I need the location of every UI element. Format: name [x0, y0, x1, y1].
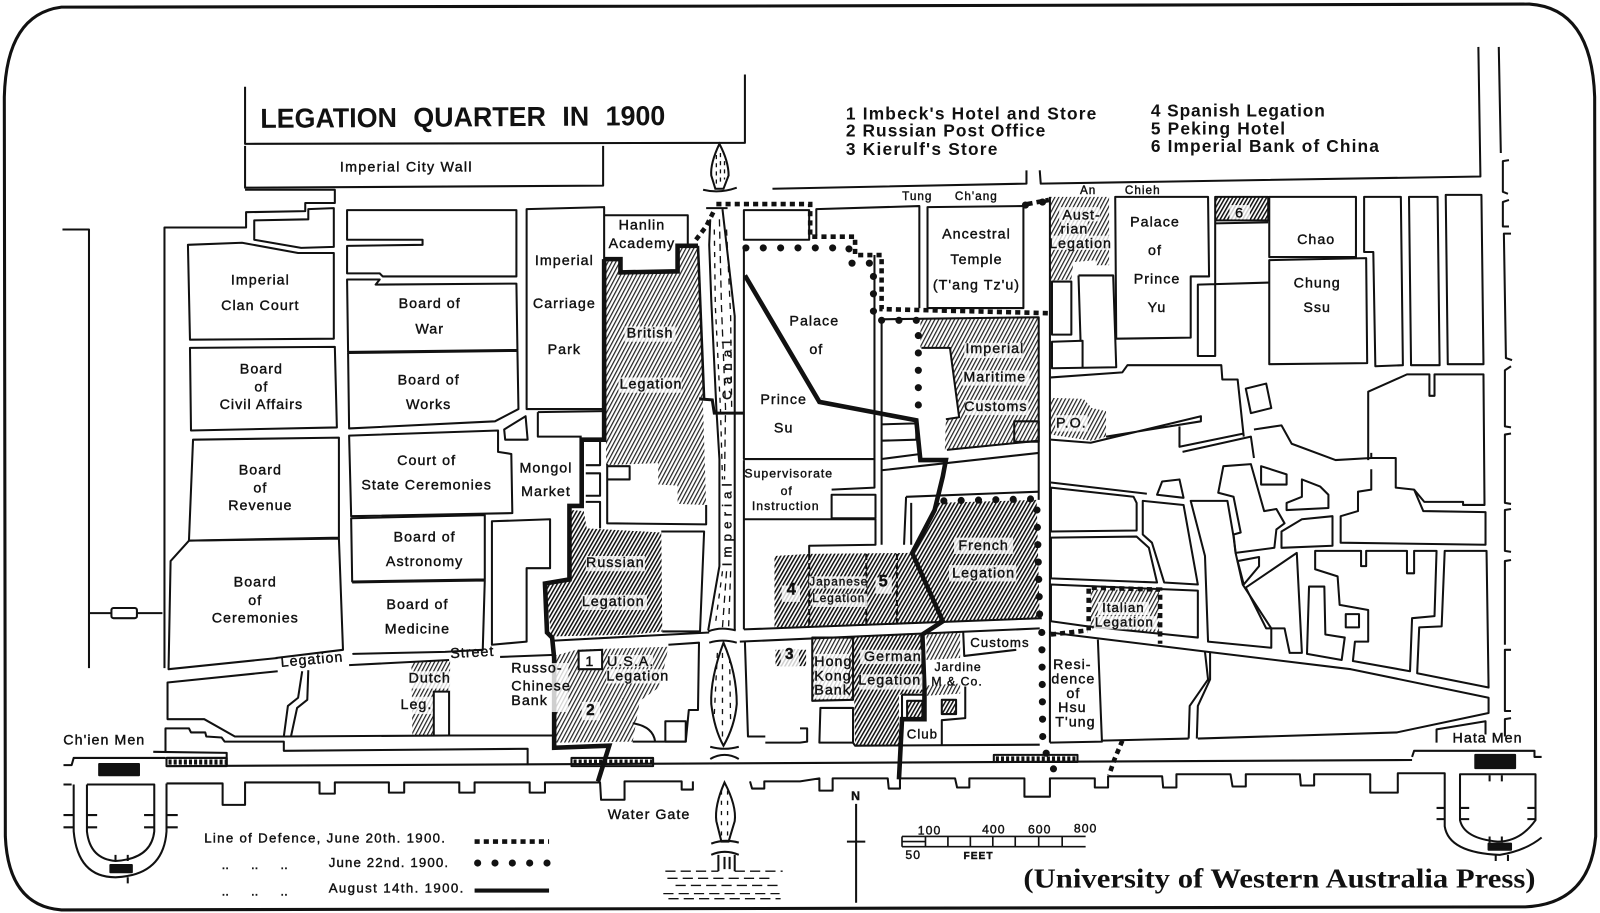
label: Ancestral Temple: Ancestral — [942, 227, 1011, 243]
label: Palace of Prince Su: of — [809, 342, 823, 358]
label: Board of Revenue: Board — [239, 462, 282, 478]
label: 1: 1 — [585, 654, 594, 670]
label: Jardine M and Co: M & Co. — [931, 675, 983, 689]
label: Board of Civil Affairs: of — [254, 380, 268, 396]
city blocks west — [62, 74, 745, 765]
label: Residence of Hsu T'ung: dence — [1051, 671, 1095, 687]
label: Italian Legation: Italian — [1102, 600, 1145, 615]
label: Board of Revenue: of — [253, 481, 267, 497]
label: Board of Civil Affairs: Board — [240, 361, 283, 377]
label: Legation Street west: Legation — [280, 649, 344, 671]
label: Supervisorate of Instruction: Supervisorate — [744, 466, 833, 480]
label: Hata Men: Hata Men — [1453, 731, 1523, 747]
label: Board of Works: Works — [406, 397, 451, 413]
label: Palace of Prince Su: Palace — [789, 313, 839, 329]
label: Residence of Hsu T'ung: Hsu — [1058, 700, 1087, 716]
Austrian Legation area — [1050, 197, 1109, 281]
Russian Legation area — [546, 510, 662, 637]
label: Jardine M and Co: Jardine — [934, 660, 982, 674]
north arrow — [847, 789, 865, 903]
label: Chung Ssu: Ssu — [1303, 300, 1331, 316]
south wall with bastions — [167, 773, 1542, 855]
label: 4: 4 — [787, 581, 797, 599]
label: Board of Ceremonies: Ceremonies — [212, 610, 299, 626]
scale bar: 800 — [1074, 821, 1097, 835]
label: Residence of Hsu T'ung: T'ung — [1055, 714, 1096, 730]
scale bar: 400 — [982, 822, 1006, 836]
Club hatch — [907, 700, 956, 718]
label: Austrian Legation: Legation — [1049, 236, 1112, 252]
top canal leaf — [711, 144, 729, 189]
label: Chung Ssu: Chung — [1294, 276, 1341, 292]
label: USA Legation: U.S.A. — [607, 654, 654, 670]
city blocks east — [772, 47, 1512, 743]
label: Board of Ceremonies: Board — [234, 575, 277, 591]
label: Ch'ien Men: Ch'ien Men — [63, 733, 145, 749]
label: Legation Street east: Street — [450, 644, 495, 662]
legation hatched areas — [411, 197, 1268, 746]
label: British Legation: Legation — [620, 377, 683, 393]
scale bar: 50 — [905, 848, 921, 862]
label: Hong Kong Bank: Bank — [814, 683, 851, 699]
label: Imperial Maritime Customs: Imperial — [965, 341, 1024, 357]
label: French Legation: Legation — [952, 565, 1015, 581]
Kierulf's Store area — [776, 650, 806, 666]
water ripples — [663, 871, 783, 899]
label: Russian Legation: Legation — [582, 594, 645, 610]
label: Palace of Prince Su: Prince — [760, 392, 807, 408]
Hong Kong Bank area — [812, 638, 853, 701]
label: Supervisorate of Instruction: Instruction — [752, 499, 820, 513]
label: Imperial Carriage Park: Park — [548, 342, 581, 358]
wall strips — [167, 755, 1077, 766]
line of defence: August 14th — [545, 246, 946, 781]
label: Mongol Market: Mongol — [520, 460, 572, 476]
white patches behind labels — [402, 205, 1250, 720]
label: 3: 3 — [785, 646, 795, 663]
label: Palace of Prince Yu: Yu — [1148, 300, 1166, 316]
scale bar: 600 — [1028, 822, 1051, 836]
Hata Men gate tower — [1475, 755, 1515, 768]
label: Residence of Hsu T'ung: of — [1066, 686, 1080, 702]
north arrow: N — [851, 789, 861, 803]
label: Canal: Canal — [720, 335, 735, 400]
label: Palace of Prince Yu: Palace — [1130, 214, 1180, 230]
Dutch Legation area — [411, 661, 450, 737]
number box 1 — [579, 650, 602, 669]
label: German Legation: German — [864, 649, 922, 665]
label: Russo-Chinese Bank: Russo- — [511, 660, 563, 676]
label: Supervisorate of Instruction: of — [781, 484, 793, 498]
label: Tung Chiang street: Tung Ch'ang — [902, 190, 998, 203]
German Legation area — [853, 635, 924, 746]
label: Residence of Hsu T'ung: Resi- — [1053, 657, 1092, 673]
label: Hanlin Academy: Academy — [609, 236, 675, 252]
label: Palace of Prince Yu: of — [1148, 243, 1162, 259]
label: Imperial Carriage Park: Carriage — [533, 296, 596, 312]
legend row: June 22nd: .. .. .. — [222, 857, 288, 872]
source credit: (University of Western Australia Press) — [1023, 862, 1536, 893]
label: Court of State Ceremonies: State Ceremonies — [361, 478, 492, 494]
label: Water Gate: Water Gate — [608, 807, 690, 823]
British Legation area — [604, 246, 706, 505]
label: Russo-Chinese Bank: Bank — [511, 693, 548, 709]
legend row: June 22nd: June 22nd. 1900. — [329, 855, 449, 870]
key: left column: 2 Russian Post Office — [846, 121, 1046, 141]
scale bar: 100 — [918, 823, 941, 837]
label: Mongol Market: Market — [521, 484, 571, 500]
label: Imperial Clan Court: Imperial — [231, 273, 290, 289]
label: Dutch Legation: Dutch — [409, 670, 451, 686]
Imperial Maritime Customs area — [920, 317, 1039, 450]
label: 5: 5 — [879, 573, 889, 591]
water gate leaf — [716, 782, 735, 842]
label: Chao: Chao — [1297, 232, 1335, 248]
label: 2: 2 — [586, 702, 596, 719]
label: British Legation: British — [627, 326, 673, 342]
label: Board of Revenue: Revenue — [228, 498, 292, 514]
label: Hong Kong Bank: Kong — [814, 668, 852, 684]
Italian Legation area — [1091, 590, 1159, 632]
label: Imperial Maritime Customs: Customs — [964, 399, 1028, 415]
city blocks centre — [740, 206, 1042, 746]
label: Imperial Clan Court: Clan Court — [221, 298, 300, 314]
label: Board of Medicine: Medicine — [385, 621, 450, 637]
key: left column: 1 Imbeck's Hotel and Store — [846, 103, 1097, 123]
label: Imperial Canal: Imperial — [720, 478, 735, 566]
canal — [663, 144, 783, 899]
legend row: August 14th: .. .. .. — [222, 884, 288, 899]
main canal banks — [708, 209, 735, 630]
Ch'ien Men gate tower — [99, 764, 139, 775]
key: right column: 5 Peking Hotel — [1151, 119, 1286, 139]
label: Court of State Ceremonies: Court of — [397, 453, 456, 469]
label: Russian Legation: Russian — [586, 555, 645, 571]
Japanese Legation area — [774, 553, 943, 627]
Post Office area — [1051, 398, 1106, 441]
key: left column — [846, 103, 1097, 159]
Jardine area — [926, 632, 960, 696]
line of defence: June 22nd — [746, 201, 1059, 777]
label: An Chieh street: An Chieh — [1080, 184, 1161, 197]
label: USA Legation: Legation — [606, 668, 669, 684]
label: Board of Civil Affairs: Civil Affairs — [220, 397, 303, 413]
lower canal leaf — [711, 643, 737, 746]
Ch'ien Men barbican — [63, 783, 167, 877]
label: Board of War: War — [415, 322, 444, 338]
label: Austrian Legation: Aust- — [1062, 207, 1101, 223]
key: right column: 4 Spanish Legation — [1151, 100, 1325, 120]
legend row: August 14th: August 14th. 1900. — [329, 881, 464, 896]
legend — [204, 831, 549, 899]
label: Japanese Legation: Legation — [812, 592, 865, 605]
map title: LEGATION QUARTER IN 1900 — [260, 100, 665, 134]
label: Austrian Legation: rian — [1060, 222, 1088, 238]
legend row: June 20th: Line of Defence, June 20th. 1900. — [204, 831, 446, 846]
key: right column — [1151, 100, 1379, 156]
label: Ancestral Temple: Temple — [950, 252, 1003, 268]
label: Customs: Customs — [970, 635, 1030, 650]
label: 6: 6 — [1235, 205, 1244, 221]
label: P.O.: P.O. — [1056, 415, 1087, 431]
scale bar: FEET — [963, 851, 994, 862]
label: Club: Club — [907, 727, 938, 742]
label: Imperial Maritime Customs: Maritime — [963, 370, 1026, 386]
label: Hanlin Academy: Hanlin — [619, 218, 665, 234]
label: Imperial City Wall: Imperial City Wall — [340, 159, 473, 175]
label: Board of Astronomy: Board of — [394, 530, 456, 546]
label: Italian Legation: Legation — [1095, 614, 1154, 629]
label: Russo-Chinese Bank: Chinese — [511, 679, 571, 695]
label: Japanese Legation: Japanese — [809, 576, 868, 589]
label: Ancestral Temple: (T'ang Tz'u) — [933, 278, 1020, 294]
line of defence: June 20th — [696, 200, 1160, 775]
legend row: June 22nd — [222, 855, 549, 872]
key: left column: 3 Kierulf's Store — [846, 139, 998, 159]
label: French Legation: French — [958, 538, 1009, 554]
label: Dutch Legation: Leg. — [401, 697, 432, 713]
USA Legation area — [554, 647, 668, 743]
label: Palace of Prince Su: Su — [774, 421, 793, 437]
label: Board of War: Board of — [399, 296, 461, 312]
key: right column: 6 Imperial Bank of China — [1151, 136, 1379, 156]
label: Board of Astronomy: Astronomy — [386, 554, 463, 570]
label: German Legation: Legation — [858, 672, 921, 688]
label: Board of Ceremonies: of — [248, 593, 262, 609]
label: Hong Kong Bank: Hong — [814, 654, 852, 670]
city wall and gates — [63, 751, 1542, 883]
French Legation area — [912, 500, 1040, 621]
label: Palace of Prince Yu: Prince — [1134, 272, 1180, 288]
legend row: August 14th — [222, 881, 549, 899]
Imperial Bank of China area — [1215, 197, 1268, 220]
label: Board of Works: Board of — [398, 373, 460, 389]
label: Imperial Carriage Park: Imperial — [535, 253, 594, 269]
scale bar — [902, 821, 1097, 862]
label: Board of Medicine: Board of — [386, 597, 449, 613]
